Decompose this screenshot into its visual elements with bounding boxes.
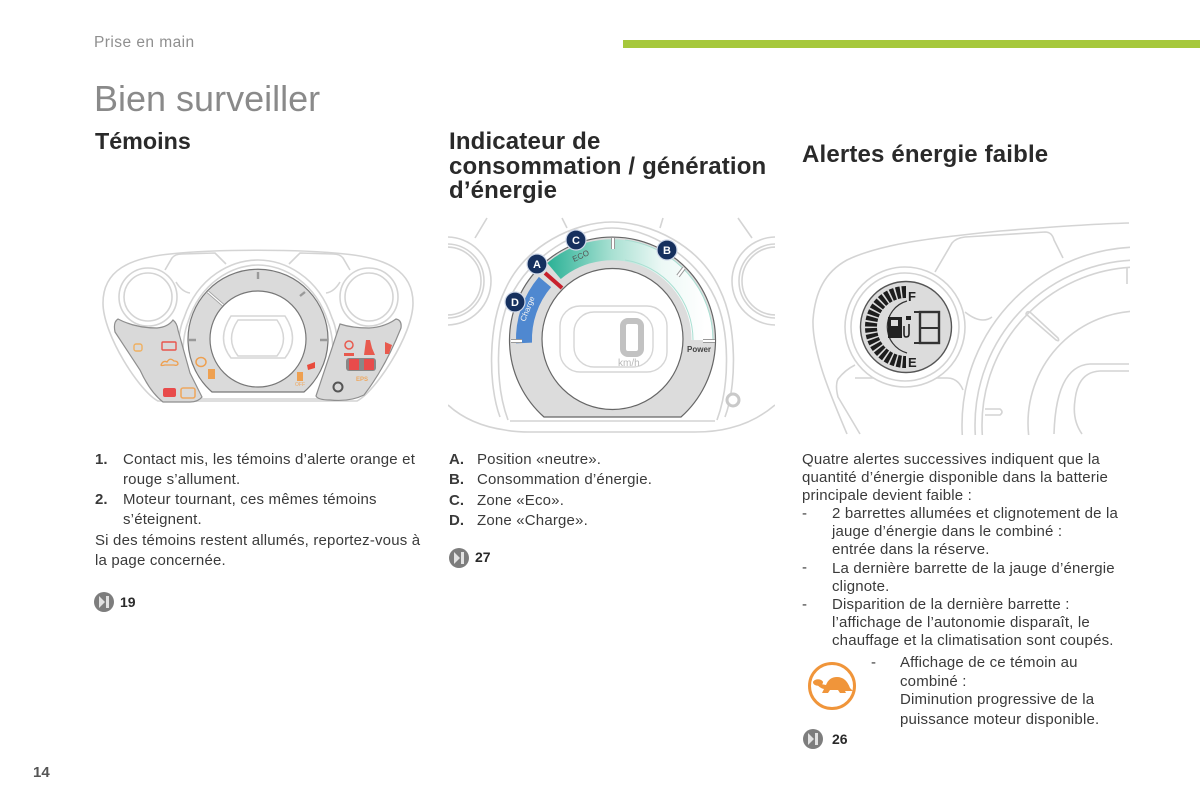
illustration: instrument cluster warning lights [102,250,414,403]
gauge centre and display [542,268,683,410]
green header bar [623,40,1200,48]
text: indicateur legend: D. [449,512,464,529]
text: témoins: Moteur tournant, ces mêmes témoins [123,491,377,508]
gauge ticks and power label [511,238,715,354]
text: alertes: La dernière barrette de la jauge d’énergie [832,560,1115,577]
text: témoins: rouge s’allument. [123,471,240,488]
heading: alertes: Alertes énergie faible [802,141,1048,168]
text: indicateur legend: Zone «Charge». [477,512,588,529]
text: indicateur legend: Consommation d’énergie. [477,471,652,488]
text: témoins: 2. [95,491,108,508]
title: Bien surveiller [94,78,320,119]
text: témoins [95,451,420,569]
badges A B C D: D [511,297,519,309]
reference: page 26 [803,729,848,749]
text: indicateur legend: C. [449,492,464,509]
text: turtle warning: Affichage de ce témoin au [900,654,1078,671]
charge zone [519,282,545,343]
charge zone: Charge [519,295,537,323]
gauge body [510,237,716,417]
text: alertes: chauffage et la climatisation sont coupés. [832,632,1114,649]
reference: page 19 [94,592,136,612]
text: alertes: quantité d’énergie disponible dans la batterie [802,469,1108,486]
badges A B C D: A [533,259,541,271]
right warning panel: EPS [356,377,368,383]
fuel display: F [908,289,916,304]
text: alertes: - [802,505,807,522]
fuel display [845,267,965,387]
central gauge: OFF [295,382,305,388]
text: turtle warning: - [871,654,876,671]
text: alertes: clignote. [832,578,890,595]
text: indicateur legend: B. [449,471,464,488]
text: alertes: entrée dans la réserve. [832,541,990,558]
heading: indicateur: Indicateur de [449,128,600,155]
text: indicateur legend: Zone «Eco». [477,492,564,509]
heading: indicateur [449,128,766,204]
text: alertes: Quatre alertes successives indiquent que la [802,451,1100,468]
text: témoins: s’éteignent. [123,511,202,528]
text: alertes: - [802,596,807,613]
reference: page 27: 27 [475,549,491,565]
icon: turtle warning light [808,662,856,710]
text: indicateur legend: Position «neutre». [477,451,601,468]
heading: indicateur: d’énergie [449,177,557,204]
text: alertes: principale devient faible : [802,487,972,504]
text: turtle warning: combiné : [900,673,967,690]
badges A B C D: B [663,245,671,257]
text: alertes [802,451,1118,649]
text: témoins: Si des témoins restent allumés, reportez-vous à [95,532,420,549]
left warning panel [114,319,202,402]
badges A B C D [505,230,677,312]
text: turtle warning: Diminution progressive de la [900,691,1094,708]
illustration: low energy gauge [812,222,1130,435]
neutral marker [545,273,562,288]
eco zone [554,240,713,340]
illustration: energy consumption gauge [448,218,775,433]
heading: indicateur: consommation / génération [449,152,766,180]
central gauge [188,269,328,392]
text: turtle warning [871,654,1099,728]
reference: page 19: 19 [120,594,136,610]
section label: Prise en main [94,34,195,51]
heading: témoins: Témoins [95,128,191,154]
text: turtle warning: puissance moteur disponible. [900,711,1099,728]
text: témoins: 1. [95,451,108,468]
text: alertes: l’affichage de l’autonomie disparaît, le [832,614,1090,631]
text: alertes: Disparition de la dernière barrette : [832,596,1070,613]
text: indicateur legend [449,451,652,529]
text: alertes: 2 barrettes allumées et clignotement de la [832,505,1118,522]
text: indicateur legend: A. [449,451,464,468]
reference: page 27 [449,548,491,568]
fuel display: E [908,355,917,370]
eco zone: ECO [571,248,591,264]
power button [727,394,739,406]
text: alertes: jauge d’énergie dans le combiné : [832,523,1062,540]
page number: 14 [33,764,50,781]
gauge ticks and power label: Power [687,345,711,354]
gauge centre and display: km/h [618,358,640,369]
reference: page 26: 26 [832,731,848,747]
text: alertes: - [802,559,807,576]
text: témoins: Contact mis, les témoins d’alerte orange et [123,451,415,468]
right warning panel [316,319,401,400]
badges A B C D: C [572,235,580,247]
text: témoins: la page concernée. [95,552,226,569]
